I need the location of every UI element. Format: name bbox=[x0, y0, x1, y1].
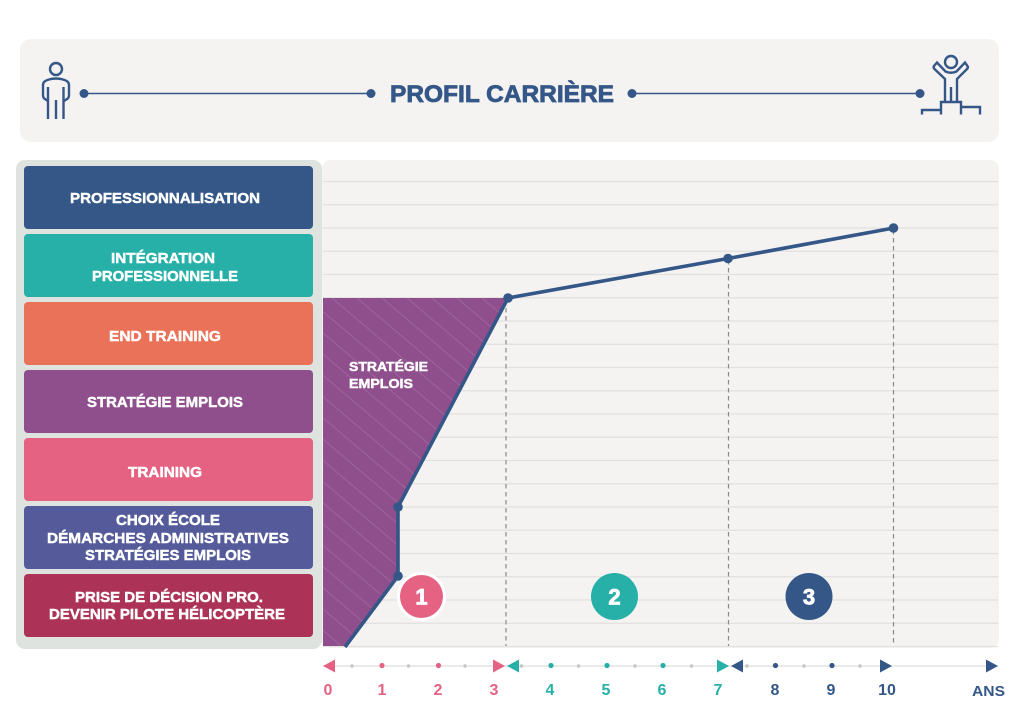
stage: choix école bbox=[24, 506, 313, 569]
timeline axis bbox=[323, 660, 1005, 700]
title: PROFIL CARRIÈRE bbox=[390, 80, 614, 108]
period 1 markers bbox=[323, 660, 505, 699]
stage: choix école: STRATÉGIES EMPLOIS bbox=[85, 547, 251, 564]
phase badge 2: 2 bbox=[608, 584, 621, 610]
shaded area: stratégie emplois: EMPLOIS bbox=[349, 376, 413, 391]
stage: prise de décision: DEVENIR PILOTE HÉLICOPTÈRE bbox=[49, 606, 285, 623]
stage: choix école: CHOIX ÉCOLE bbox=[116, 512, 220, 529]
header panel bbox=[20, 39, 999, 142]
stage: training: TRAINING bbox=[128, 465, 202, 481]
icon: person on podium bbox=[922, 56, 980, 114]
phase badge 3 bbox=[786, 573, 832, 620]
stage: prise de décision bbox=[24, 574, 313, 637]
stage: intégration professionnelle: INTÉGRATION bbox=[111, 250, 215, 267]
period 3 markers: 9 bbox=[827, 682, 836, 699]
period 1 markers: 1 bbox=[378, 682, 387, 699]
panel: career chart bbox=[322, 160, 999, 648]
shaded area: stratégie emplois: STRATÉGIE bbox=[349, 359, 428, 374]
period 1 markers: 2 bbox=[434, 682, 443, 699]
icon: person standing bbox=[43, 63, 69, 119]
stage: prise de décision: PRISE DE DÉCISION PRO. bbox=[75, 589, 263, 606]
period 3 markers: 10 bbox=[878, 682, 896, 699]
period 2 markers: 6 bbox=[658, 682, 667, 699]
period 1 markers: 3 bbox=[490, 682, 499, 699]
period 2 markers: 4 bbox=[546, 682, 555, 699]
shaded area: stratégie emplois bbox=[323, 298, 504, 646]
career line bbox=[345, 223, 898, 647]
phase badge 1 bbox=[397, 572, 446, 621]
period 2 markers bbox=[507, 660, 729, 699]
period 3 markers: 8 bbox=[771, 682, 780, 699]
stage: choix école: DÉMARCHES ADMINISTRATIVES bbox=[47, 530, 289, 547]
phase badge 3: 3 bbox=[803, 584, 815, 610]
stage: training bbox=[24, 438, 313, 501]
period 1 markers: 0 bbox=[324, 682, 333, 699]
period 3 markers bbox=[731, 660, 1005, 700]
phase badge 2 bbox=[591, 573, 638, 620]
stage: end training: END TRAINING bbox=[109, 329, 221, 345]
dashed year markers bbox=[506, 230, 894, 646]
stage: professionnalisation: PROFESSIONNALISATION bbox=[70, 191, 260, 207]
panel: left stages bbox=[16, 160, 322, 649]
stage: professionnalisation bbox=[24, 166, 313, 229]
stage: intégration professionnelle bbox=[24, 234, 313, 297]
phase badge 1: 1 bbox=[415, 584, 428, 610]
header line left bbox=[80, 89, 376, 98]
period 2 markers: 7 bbox=[714, 682, 723, 699]
header line right bbox=[628, 89, 924, 98]
period 2 markers: 5 bbox=[602, 682, 611, 699]
stage: stratégie emplois bbox=[24, 370, 313, 433]
stage: end training bbox=[24, 302, 313, 365]
stage: intégration professionnelle: PROFESSIONNELLE bbox=[92, 269, 238, 285]
stage: stratégie emplois: STRATÉGIE EMPLOIS bbox=[87, 394, 243, 411]
period 3 markers: ANS bbox=[972, 683, 1005, 700]
